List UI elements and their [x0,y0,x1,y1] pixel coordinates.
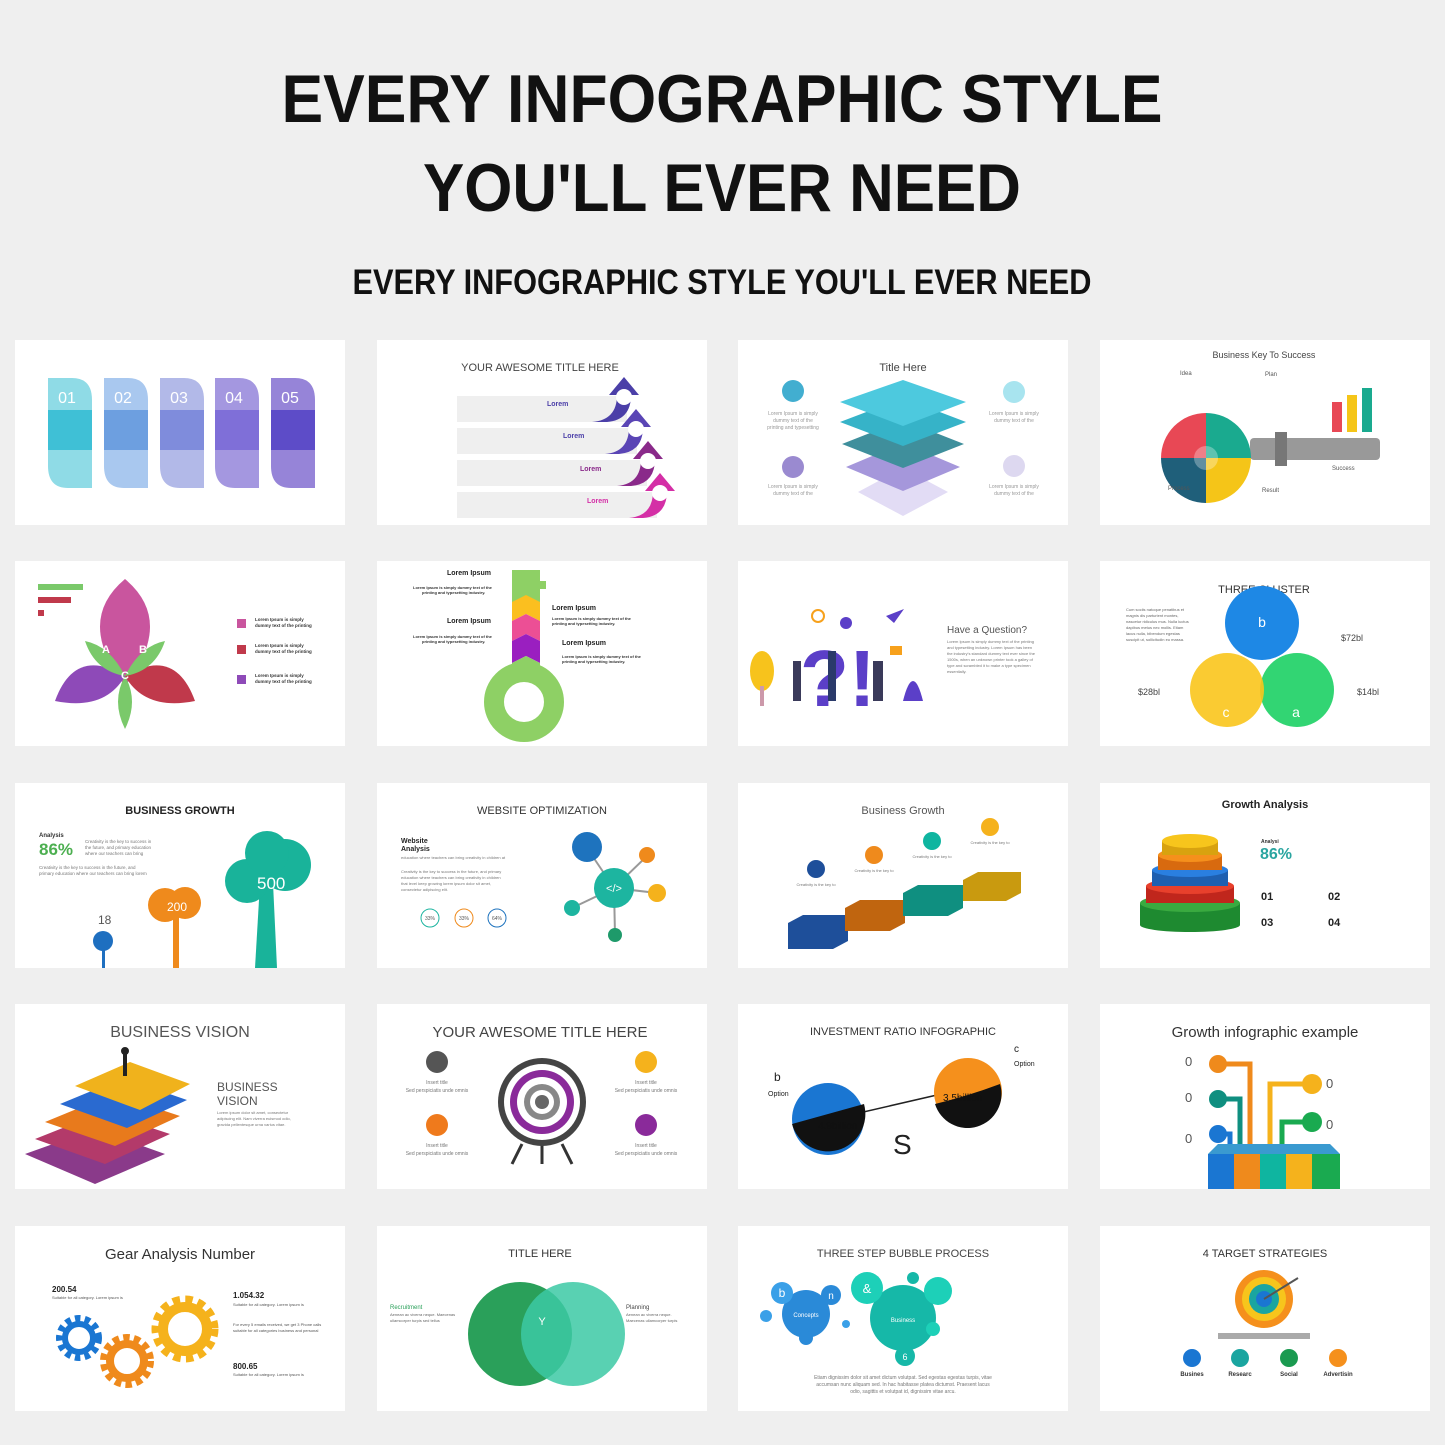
panel: petals: A [102,644,110,656]
panel: business key: Business Key To Success [1213,350,1316,360]
panel: bubble process: 6 [902,1352,908,1362]
panel: three cluster: b [1258,614,1266,630]
panel: numbered tabs: 01 [58,390,76,407]
panel: business key: Success [1332,466,1355,472]
panel: website optimization [377,783,707,968]
panel: key: Lorem Ipsum is simply dummy text of the [413,634,493,639]
panel: venn: Aenean ac viverra neque. Maecenas [390,1312,455,1317]
panel: investment ratio: S [893,1129,912,1160]
panel: growth analysis cylinders: Growth Analysis [1222,799,1308,811]
panel: gears: Suitable for all category. Lorem ipsum is [233,1372,304,1377]
panel: growth infographic example: 0 [1185,1131,1192,1146]
panel: venn: Recruitment [390,1305,423,1311]
panel: gears: 1.054.32 [233,1291,265,1300]
panel: petals: B [139,644,147,656]
panel: numbered tabs: 02 [114,390,132,407]
panel: stacked layers: dummy text of the [994,491,1034,497]
panel: bubble process: THREE STEP BUBBLE PROCESS [817,1248,989,1260]
panel: petals: Lorem Ipsum is simply [255,617,304,622]
panel: website optimization: Website [401,838,428,845]
panel: growth analysis cylinders: 04 [1328,917,1341,929]
panel: business key: Result [1262,488,1279,494]
panel: arrows: Lorem [580,466,601,473]
panel: investment ratio: Option [768,1091,789,1098]
panel: petals: C [121,670,129,682]
panel: business vision [15,1004,345,1189]
panel: business growth trees [15,783,345,968]
panel: target: Sed perspiciatis unde omnis [406,1088,469,1094]
panel: gears: 800.65 [233,1362,258,1371]
panel: key: Lorem Ipsum is simply dummy text of the [413,585,493,590]
panel: bubble process: Etiam dignissim dolor sit amet dictum volutpat. Sed egestas egestas turpis, vitae [814,1375,992,1381]
panel: stacked layers [738,340,1068,525]
panel: three cluster: nascetur ridiculus mus. Nulla luctus [1126,619,1189,624]
panel: arrows: Lorem [587,498,608,505]
panel: investment ratio: c [1014,1044,1019,1055]
panel: investment ratio: INVESTMENT RATIO INFOGRAPHIC [810,1026,996,1038]
title [282,61,1162,302]
panel: business vision: BUSINESS [217,1080,278,1094]
panel: petals: dummy text of the printing [255,623,312,628]
panel: venn: Maecenas ullamcorper turpis [626,1318,677,1323]
panel: business growth trees: Analysis [39,833,64,839]
panel: gears: Suitable for all category. Lorem ipsum is [233,1302,304,1307]
panel: website optimization: 33% [425,916,436,922]
panel: stacked layers: Title Here [879,362,927,374]
panel: business vision: adipiscing elit. Nam viverra euismod odio, [217,1116,291,1121]
panel: growth steps [738,783,1068,968]
panel: business vision: gravida pellentesque urna varius vitae. [217,1122,286,1127]
panel: venn: Y [538,1316,546,1328]
panel: key: printing and typesetting industry. [422,590,485,595]
panel: growth steps: Creativity is the key to [854,868,894,873]
panel: growth infographic example: 0 [1185,1054,1192,1069]
panel: question illustration: ?! [800,634,876,723]
panel: arrows [377,340,707,525]
panel: venn: Aenean ac viverra neque. [626,1312,672,1317]
panel: bubble process: n [828,1291,834,1302]
panel: key: Lorem Ipsum [447,570,491,577]
panel: three cluster: a [1292,704,1300,720]
panel: growth analysis cylinders: 03 [1261,917,1273,929]
panel: growth analysis cylinders: 02 [1328,891,1340,903]
panel: question illustration [738,561,1068,746]
panel: target: Insert title [635,1080,657,1086]
panel: investment ratio [738,1004,1068,1189]
panel: growth steps: Creativity is the key to [912,854,952,859]
panel: question illustration: Lorem Ipsum is simply dummy text of the printing [947,639,1034,644]
panel: question illustration: essentially. [947,669,966,674]
panel: arrows: Lorem [547,401,568,408]
panel: website optimization: </> [606,883,622,895]
panel: three cluster: THREE CLUSTER [1218,584,1310,596]
panel: bubble process: Business [891,1318,915,1324]
panel: stacked layers: Lorem Ipsum is simply [989,411,1039,417]
panel: key: Lorem Ipsum is simply dummy text of the [562,654,642,659]
panel: three cluster: $14bl [1357,687,1379,697]
panel: growth analysis cylinders: Analysi [1261,839,1279,845]
panel: key: Lorem Ipsum [562,640,606,647]
panel: key [377,561,707,746]
panel: business growth trees: BUSINESS GROWTH [125,805,235,817]
panel: petals: Lorem Ipsum is simply [255,643,304,648]
panel: gears: Gear Analysis Number [105,1246,255,1263]
panel: arrows: Lorem [563,433,584,440]
panel: target: Sed perspiciatis unde omnis [406,1151,469,1157]
panel: venn [377,1226,707,1411]
panel: website optimization: education where teachers can bring creativity in children at [401,855,506,860]
panel: business key: Plan [1265,372,1277,378]
panel: three cluster: lacus nulla, bibendum egestas [1126,631,1180,636]
title: EVERY INFOGRAPHIC STYLE YOU'LL EVER NEED [352,263,1092,302]
panel: business key: Process [1168,486,1190,492]
panel: stacked layers: dummy text of the [773,418,813,424]
panel: venn: TITLE HERE [508,1248,572,1260]
panel: growth analysis cylinders [1100,783,1430,968]
panel: petals: dummy text of the printing [255,649,312,654]
panel: website optimization: consectetur adipiscing elit. [401,887,448,892]
panel: business vision: VISION [217,1094,258,1108]
panel: growth steps: Creativity is the key to [970,840,1010,845]
panel: website optimization: 64% [492,916,503,922]
panel: key: Lorem Ipsum [552,605,596,612]
panel: target strategies: Researc [1228,1372,1252,1378]
panel: target strategies [1100,1226,1430,1411]
panel: target: Sed perspiciatis unde omnis [615,1151,678,1157]
panel: gears: suitable for all categories business and personal [233,1328,318,1333]
panel: three cluster: Cum sociis natoque penatibus et [1126,607,1185,612]
panel: investment ratio: b [774,1070,781,1084]
panel: numbered tabs: 04 [225,390,243,407]
panel: three cluster: c [1222,704,1230,720]
panel: venn: Planning [626,1305,649,1311]
panel: stacked layers: printing and typesetting [767,425,819,431]
panel: stacked layers: Lorem Ipsum is simply [989,484,1039,490]
panel: three cluster: $72bl [1341,633,1363,643]
panel: target: YOUR AWESOME TITLE HERE [432,1024,648,1041]
panel: stacked layers: dummy text of the [773,491,813,497]
panel: website optimization: Creativity is the key to success in the future, and primary [401,869,501,874]
panel: growth infographic example: 0 [1326,1117,1333,1132]
panel: business growth trees: Creativity is the key to success in [85,839,152,844]
panel: target strategies: Busines [1180,1372,1204,1378]
panel: three cluster: $28bl [1138,687,1160,697]
panel: bubble process: odio, sagittis et volutpat id, dignissim vitae arcu. [850,1389,956,1395]
panel: gears: Suitable for all category. Lorem ipsum is [52,1295,123,1300]
panel: growth infographic example: 0 [1326,1076,1333,1091]
panel: growth infographic example: 0 [1185,1090,1192,1105]
panel: business key: Idea [1180,371,1192,377]
panel: petals: dummy text of the printing [255,679,312,684]
panel: bubble process: Concepts [793,1313,819,1319]
panel: target: Insert title [426,1143,448,1149]
panel: website optimization: education where teachers can bring creativity in children [401,875,501,880]
panel: business growth trees: 200 [167,900,187,914]
panel: venn: ullamcorper turpis sed tellus [390,1318,440,1323]
panel: growth analysis cylinders: 86% [1260,846,1292,863]
panel: question illustration: the industry's standard dummy text ever since the [947,651,1036,656]
panel: stacked layers: Lorem Ipsum is simply [768,411,818,417]
panel: stacked layers: Lorem Ipsum is simply [768,484,818,490]
panel: target: Insert title [426,1080,448,1086]
panel: growth analysis cylinders: 01 [1261,891,1273,903]
panel: target strategies: Advertisin [1323,1372,1353,1378]
panel: target strategies: Social [1280,1372,1298,1378]
panel: growth steps: Business Growth [861,805,945,817]
title: YOU'LL EVER NEED [423,150,1021,226]
panel: stacked layers: dummy text of the [994,418,1034,424]
panel: business growth trees: 500 [257,874,285,893]
panel: business growth trees: the future, and primary education [85,845,152,850]
panel: bubble process: & [863,1281,872,1296]
panel: numbered tabs: 05 [281,390,299,407]
panel: key: Lorem Ipsum [447,618,491,625]
panel: three cluster: suscipit ut, sollicitudin eu massa. [1126,637,1184,642]
panel: petals [15,561,345,746]
panel: question illustration: 1500s, when an unknown printer took a galley of [947,657,1034,662]
panel: petals: Lorem Ipsum is simply [255,673,304,678]
panel: gears: 200.54 [52,1285,77,1294]
panel: business growth trees: Creativity is the key to success in the future, and [39,865,136,870]
panel: three cluster: dapibus metus nec mollis. Etiam [1126,625,1184,630]
panel: key: printing and typesetting industry. [562,659,625,664]
panel: website optimization: WEBSITE OPTIMIZATION [477,805,607,817]
panel: business growth trees: 18 [98,913,112,927]
panel: question illustration: and typesetting industry. Lorem Ipsum has been [947,645,1032,650]
panel: bubble process: accumsan nunc aliquam sed. In hac habitasse platea dictumst. Praesent lacus [816,1382,990,1388]
panel: business vision: Lorem ipsum dolor sit amet, consectetur [217,1110,289,1115]
panel: business growth trees: where our teachers can bring [85,851,144,856]
panel: bubble process [738,1226,1068,1411]
panel: growth infographic example [1100,1004,1430,1189]
title: EVERY INFOGRAPHIC STYLE [282,61,1162,137]
panel: target: Sed perspiciatis unde omnis [615,1088,678,1094]
panel: investment ratio: 4.9billion [818,1121,857,1132]
panel: business key [1100,340,1430,525]
panel: website optimization: Analysis [401,846,430,853]
panel: growth steps: Creativity is the key to [796,882,836,887]
panel: numbered tabs [15,340,345,525]
panel: target strategies: 4 TARGET STRATEGIES [1203,1248,1327,1260]
panel: business vision: BUSINESS VISION [110,1024,250,1041]
panel: gears [15,1226,345,1411]
panel: question illustration: type and scrambled it to make a type specimen [947,663,1031,668]
panel: key: printing and typesetting industry. [422,639,485,644]
panel: gears: For every 5 emails received, we get 3 Phone calls [233,1322,321,1327]
panel: investment ratio: 3.5billion [943,1093,982,1104]
panel: website optimization: that level keep growing lorem ipsum dolor sit amet, [401,881,491,886]
panel: key: printing and typesetting industry. [552,621,615,626]
panel: three cluster [1100,561,1430,746]
panel: business growth trees: primary education where our teachers can bring lorem [39,871,147,876]
panel: question illustration: Have a Question? [947,625,1027,636]
panel: numbered tabs: 03 [170,390,188,407]
panel: growth infographic example: Growth infographic example [1172,1024,1358,1041]
panel: three cluster: magnis dis parturient montes, [1126,613,1178,618]
panel: bubble process: b [779,1286,786,1300]
panel: website optimization: 33% [459,916,470,922]
panel: investment ratio: Option [1014,1061,1035,1068]
panel: target [377,1004,707,1189]
panel: key: Lorem Ipsum is simply dummy text of the [552,616,632,621]
panel: business growth trees: 86% [39,840,73,859]
panel: target: Insert title [635,1143,657,1149]
panel: arrows: YOUR AWESOME TITLE HERE [461,362,619,374]
